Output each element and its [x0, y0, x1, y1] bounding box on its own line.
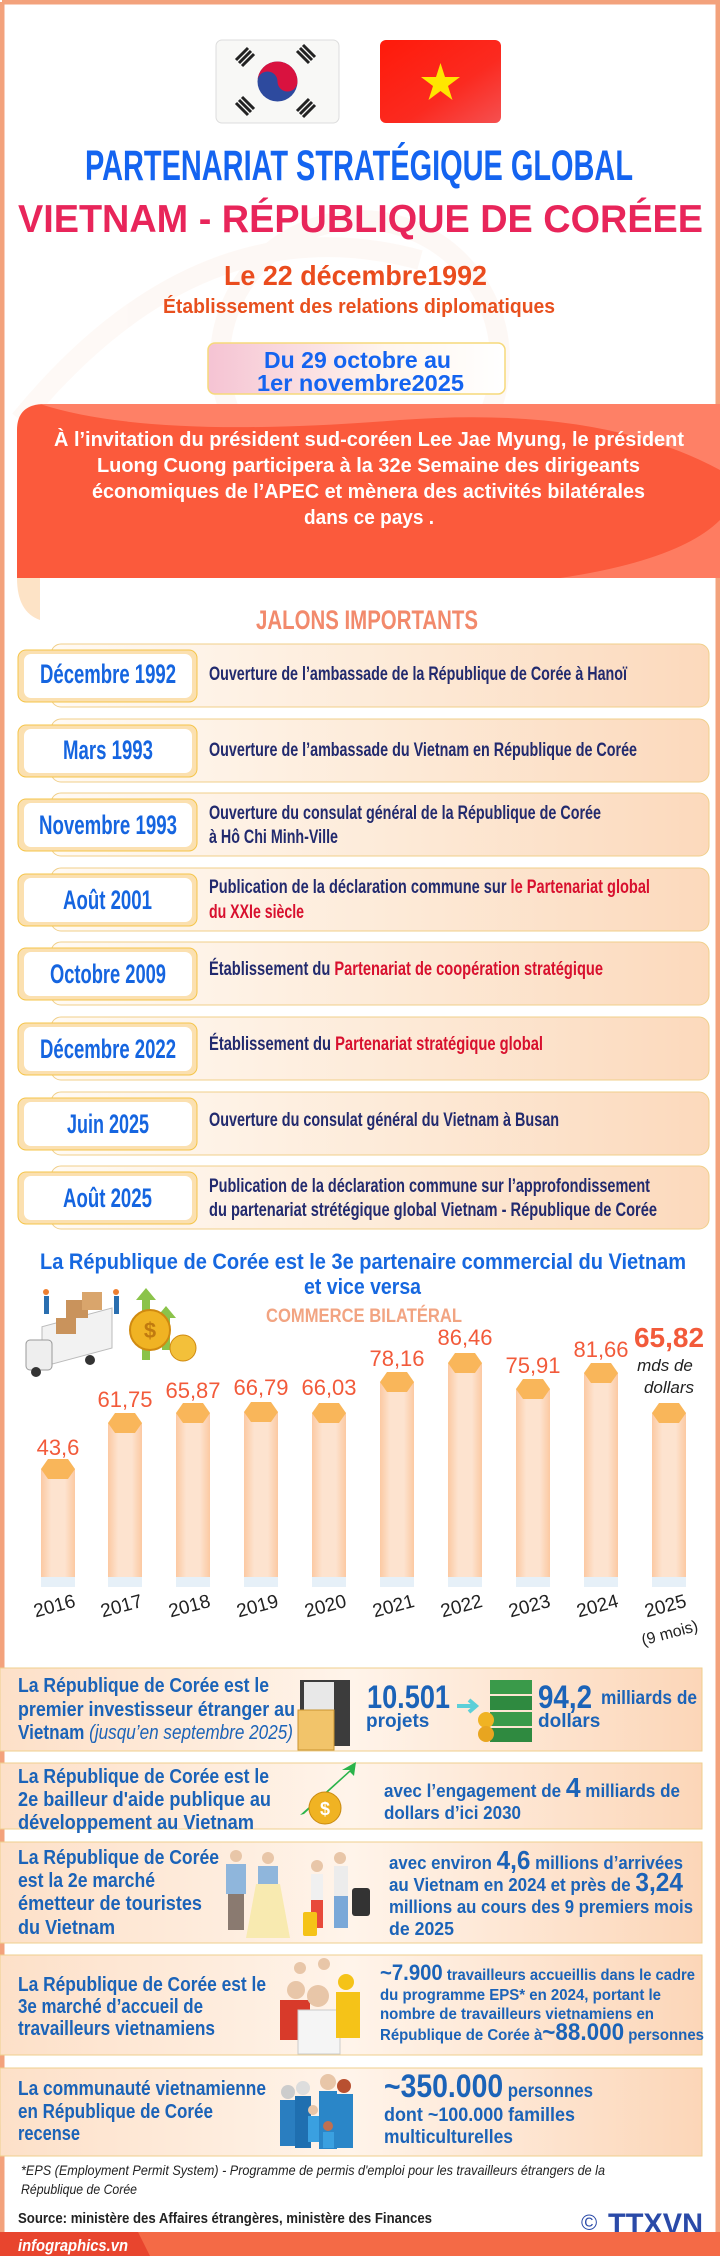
logo: TTXVN: TTXVN	[608, 2208, 703, 2241]
logo: TTXVN: ©	[581, 2210, 597, 2235]
panel: community: en République de Corée	[18, 2101, 213, 2123]
panel: workers	[0, 1955, 704, 2055]
bar chart: 78,16	[369, 1346, 425, 1371]
panel: tourism: du Vietnam	[18, 1917, 115, 1939]
panel: investment: milliards de	[601, 1688, 697, 1709]
panel: investment: 94,2	[538, 1679, 592, 1715]
milestone 4: Août 2001	[63, 885, 152, 915]
milestone 3: Novembre 1993	[39, 810, 177, 840]
red banner	[17, 404, 720, 620]
panel: development aid: dollars d’ici 2030	[384, 1803, 521, 1823]
footnote: *EPS (Employment Permit System) - Programme de permis d'emploi pour les travailleurs étrangers de la	[21, 2162, 605, 2178]
panel: community: dont ~100.000 familles	[384, 2105, 575, 2126]
panel: workers: République de Corée à~88.000 personnes	[380, 2019, 704, 2046]
chart subtitle: COMMERCE BILATÉRAL	[266, 1305, 462, 1327]
panel: investment: projets	[366, 1711, 429, 1732]
milestone 2: Mars 1993	[63, 735, 153, 765]
icon: tourists in hanbok	[226, 1850, 370, 1938]
milestone 6: Décembre 2022	[40, 1034, 176, 1064]
icon: truck with boxes	[26, 1289, 119, 1377]
milestone 3: à Hô Chi Minh-Ville	[209, 827, 338, 848]
bar chart: 2019	[234, 1591, 281, 1622]
panel: community	[0, 2068, 702, 2156]
red banner: dans ce pays .	[304, 507, 434, 529]
panel: workers: travailleurs vietnamiens	[18, 2018, 215, 2040]
source: Source: ministère des Affaires étrangères, ministère des Finances	[18, 2210, 432, 2227]
arrow	[457, 1700, 476, 1712]
milestone 3	[18, 793, 709, 856]
panel: tourism: avec environ 4,6 millions d’arrivées	[389, 1845, 683, 1875]
logo: TTXVN: Vietnam News Agency	[640, 2237, 690, 2243]
panel: tourism: au Vietnam en 2024 et près de 3,24	[389, 1867, 684, 1897]
flag: Vietnam	[380, 40, 501, 123]
red banner: À l’invitation du président sud-coréen Lee Jae Myung, le président	[54, 428, 684, 451]
chart title: et vice versa	[304, 1274, 422, 1299]
milestone 8: Août 2025	[63, 1183, 152, 1213]
panel: development aid: 2e bailleur d'aide publique au	[18, 1789, 271, 1811]
panel: community: recense	[18, 2123, 80, 2145]
icon: money stack	[478, 1680, 532, 1742]
panel: tourism: émetteur de touristes	[18, 1893, 202, 1915]
milestone 6	[18, 1017, 709, 1080]
red banner: Luong Cuong participera à la 32e Semaine des dirigeants	[97, 455, 640, 477]
milestone 7: Juin 2025	[67, 1109, 149, 1139]
icon: coins with arrows	[130, 1288, 196, 1361]
background swirl	[20, 220, 500, 500]
bar chart	[31, 1322, 704, 1649]
milestone 5: Octobre 2009	[50, 959, 166, 989]
flag: South Korea	[216, 40, 339, 123]
panel: development aid: avec l’engagement de 4 milliards de	[384, 1772, 680, 1803]
panel: community: multiculturelles	[384, 2127, 513, 2148]
milestone 4	[18, 868, 709, 931]
milestone 2	[18, 719, 709, 782]
milestone 3: Ouverture du consulat général de la République de Corée	[209, 803, 601, 824]
visit date box	[208, 343, 505, 396]
panel: workers: ~7.900 travailleurs accueillis dans le cadre	[380, 1960, 695, 1985]
icon: folders	[298, 1680, 350, 1750]
panel: workers: nombre de travailleurs vietnamiens en	[380, 2006, 654, 2023]
bar chart: 2016	[31, 1591, 78, 1622]
panel: tourism: de 2025	[389, 1919, 454, 1939]
panel: investment	[0, 1668, 702, 1751]
bar chart: 2018	[166, 1591, 213, 1622]
footnote	[21, 2162, 605, 2197]
heading: jalons importants: JALONS IMPORTANTS	[256, 605, 478, 635]
milestone 4: Publication de la déclaration commune sur le Partenariat global	[209, 877, 650, 898]
footer bar: infographics.vn	[18, 2236, 128, 2255]
panel: investment: premier investisseur étranger au	[18, 1699, 295, 1721]
title	[18, 142, 703, 241]
panel: investment: Vietnam (jusqu’en septembre 2025)	[18, 1722, 293, 1744]
bar chart: 65,82	[634, 1322, 704, 1353]
panel: development aid: La République de Corée est le	[18, 1766, 269, 1788]
milestone 5: Établissement du Partenariat de coopération stratégique	[209, 958, 603, 980]
bar chart: 86,46	[437, 1325, 493, 1350]
footer bar	[0, 2232, 720, 2256]
bar chart: 2025	[642, 1591, 689, 1622]
bar chart: 61,75	[97, 1387, 153, 1412]
icon: coins with arrows: $	[144, 1318, 156, 1343]
chart title	[40, 1249, 686, 1299]
milestone 8	[18, 1166, 709, 1229]
milestone 4: du XXIe siècle	[209, 902, 304, 923]
milestone 1	[18, 644, 709, 707]
milestone 1: Décembre 1992	[40, 659, 176, 689]
icon: workers	[280, 1958, 360, 2054]
date of diplomatic relations	[163, 260, 555, 318]
visit date box: 1er novembre2025	[257, 370, 464, 396]
bar chart: 2020	[302, 1591, 349, 1622]
bar chart: 65,87	[165, 1378, 221, 1403]
bar chart: 2022	[438, 1591, 485, 1622]
bar chart: mds de	[637, 1356, 693, 1375]
bar chart: 43,6	[37, 1435, 79, 1460]
panel: investment: dollars	[538, 1711, 600, 1732]
bar chart: (9 mois)	[640, 1618, 700, 1649]
icon: money bag with arrow	[300, 1762, 356, 1824]
bar chart: 2021	[370, 1591, 417, 1622]
milestone 5	[18, 942, 709, 1005]
milestones list	[18, 644, 709, 1229]
bar chart: 2023	[506, 1591, 553, 1622]
panel: development aid: développement au Vietnam	[18, 1812, 254, 1834]
title: VIETNAM - RÉPUBLIQUE DE CORÉEE	[18, 197, 703, 241]
date of diplomatic relations: Établissement des relations diplomatiques	[163, 295, 555, 318]
bar chart: 75,91	[505, 1353, 561, 1378]
panel: investment: La République de Corée est le	[18, 1675, 269, 1697]
milestone 7	[18, 1092, 709, 1155]
panel: tourism: La République de Corée	[18, 1847, 219, 1869]
bar chart: 81,66	[573, 1337, 629, 1362]
panel: community: La communauté vietnamienne	[18, 2078, 266, 2100]
panel: tourism: est la 2e marché	[18, 1870, 155, 1892]
panel: workers: 3e marché d’accueil de	[18, 1996, 203, 2018]
visit date box: Du 29 octobre au	[264, 347, 451, 373]
footnote: République de Corée	[21, 2181, 137, 2197]
bar chart: dollars	[644, 1378, 695, 1397]
icon: family	[280, 2074, 353, 2149]
bar chart: 2024	[574, 1591, 621, 1622]
panel: investment: 10.501	[367, 1679, 450, 1715]
panel: tourism: millions au cours des 9 premiers mois	[389, 1897, 693, 1917]
bar chart: 2017	[98, 1591, 145, 1622]
red banner: économiques de l’APEC et mènera des activités bilatérales	[92, 481, 645, 503]
bar chart: 66,79	[233, 1375, 289, 1400]
panel: development aid	[0, 1762, 702, 1834]
milestone 6: Établissement du Partenariat stratégique global	[209, 1033, 543, 1055]
bar chart: 66,03	[301, 1375, 357, 1400]
icon: money bag with arrow: $	[320, 1799, 330, 1819]
panel: workers: La République de Corée est le	[18, 1974, 266, 1996]
date of diplomatic relations: Le 22 décembre1992	[224, 260, 487, 291]
panel: community: ~350.000 personnes	[384, 2068, 593, 2104]
panel: workers: du programme EPS* en 2024, portant le	[380, 1987, 661, 2004]
milestone 7: Ouverture du consulat général du Vietnam à Busan	[209, 1110, 559, 1131]
panel: tourism	[0, 1842, 702, 1943]
